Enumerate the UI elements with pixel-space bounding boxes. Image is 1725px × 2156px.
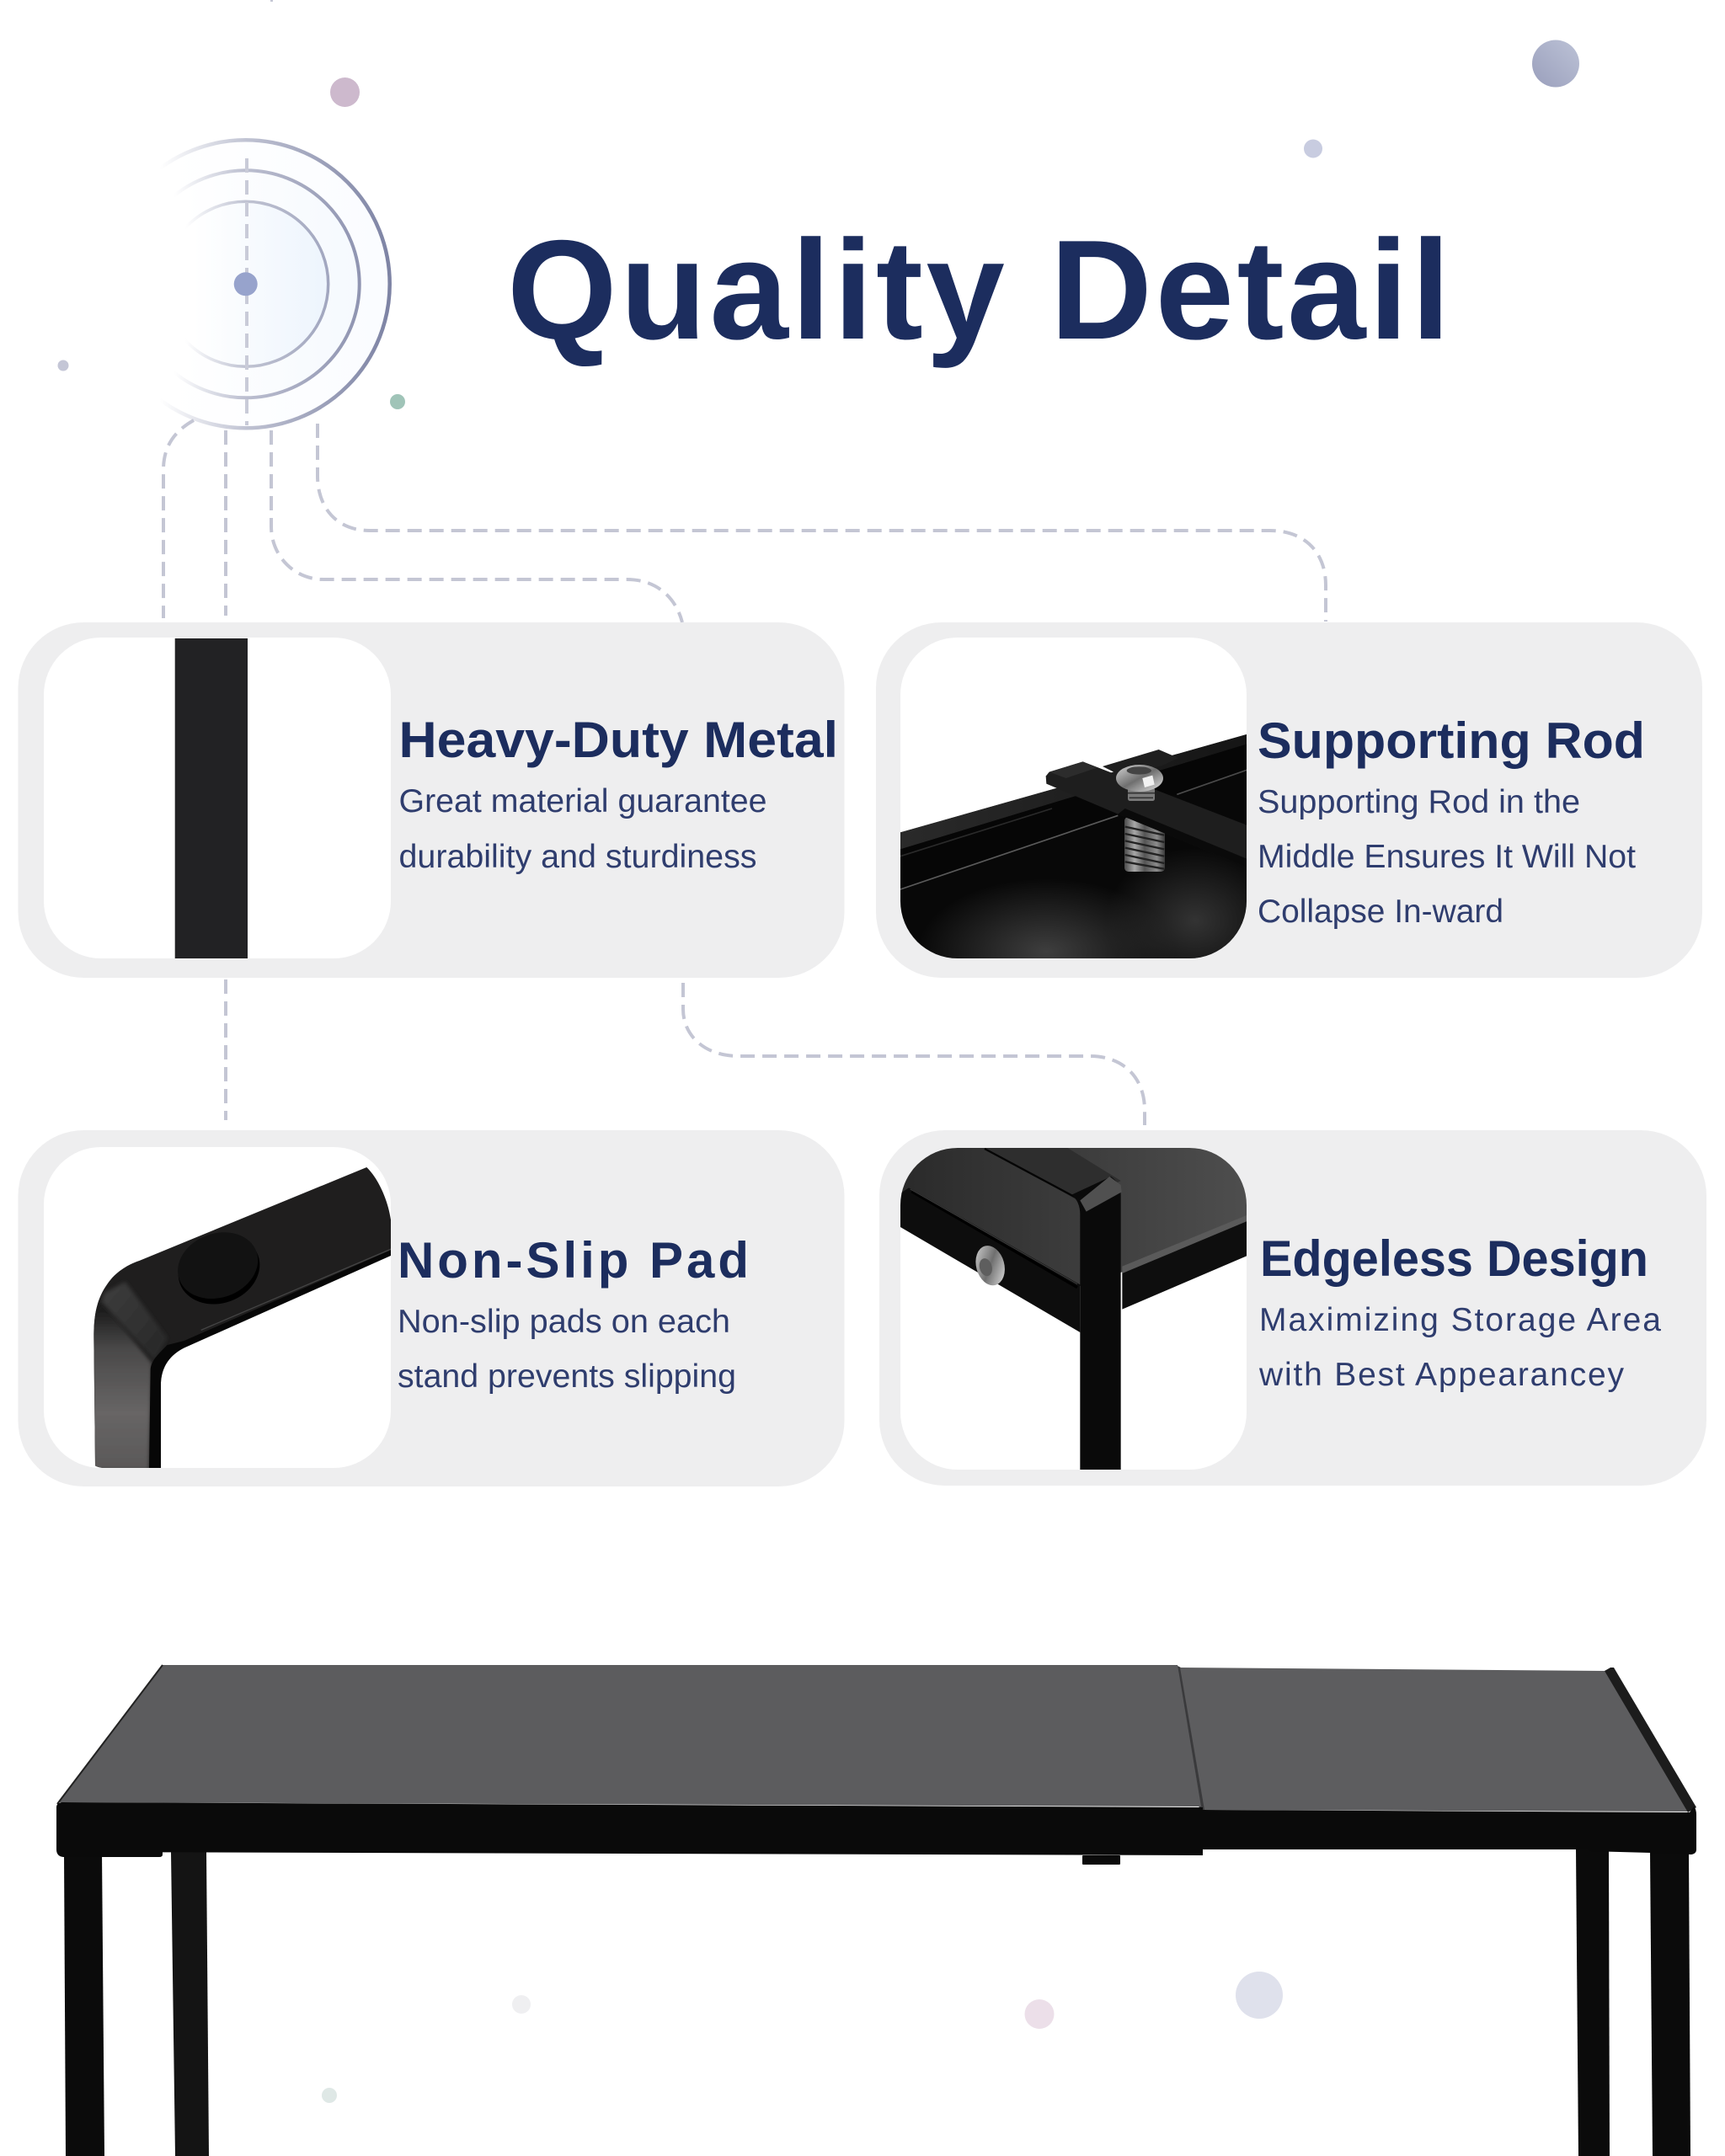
table legs: [64, 1849, 1690, 2156]
icon: concentric target circles: [102, 140, 390, 428]
product photo: black table: [56, 1665, 1696, 2156]
panel: Edgeless Design: [879, 1130, 1706, 1486]
text: Non-Slip Pad description: Non-slip pads on each: [398, 1304, 730, 1340]
decorative dots: bottom: [322, 1972, 1283, 2103]
image: supporting rod and screw: [900, 734, 1247, 958]
title: Quality Detail: [507, 211, 1450, 369]
dashed connector lines: [163, 420, 1326, 1125]
text: Heavy-Duty Metal description: [399, 783, 766, 875]
text: Edgeless Design description: Maximizing Storage Area: [1259, 1302, 1661, 1338]
text: Supporting Rod description: [1258, 784, 1636, 930]
panel: Non-Slip Pad: [19, 1130, 844, 1486]
heading: Edgeless Design: Edgeless Design: [1260, 1230, 1648, 1287]
text: Non-Slip Pad description: [398, 1304, 736, 1395]
panel: Heavy-Duty Metal: [19, 622, 844, 978]
decorative dots: top: [57, 0, 1579, 409]
image: metal leg close-up: [175, 638, 248, 958]
text: Heavy-Duty Metal description: durability and sturdiness: [399, 839, 756, 875]
heading: Heavy-Duty Metal: Heavy-Duty Metal: [399, 712, 838, 768]
text: Edgeless Design description: [1258, 1302, 1661, 1393]
image: non-slip pad on bent leg: [92, 1167, 392, 1470]
text: Supporting Rod description: Supporting Rod in the: [1258, 784, 1580, 820]
table front rail: [56, 1802, 1696, 1865]
image: edgeless table corner: [900, 1147, 1248, 1470]
table top surface: [57, 1665, 1696, 1812]
panel: Supporting Rod: [876, 622, 1702, 978]
text: Supporting Rod description: Middle Ensures It Will Not: [1258, 839, 1636, 875]
text: Supporting Rod description: Collapse In-ward: [1258, 894, 1503, 930]
text: Non-Slip Pad description: stand prevents slipping: [398, 1358, 736, 1395]
text: Heavy-Duty Metal description: Great material guarantee: [399, 783, 766, 819]
heading: Non-Slip Pad: Non-Slip Pad: [398, 1232, 749, 1289]
heading: Supporting Rod: Supporting Rod: [1258, 712, 1645, 769]
text: Edgeless Design description: with Best Appearancey: [1258, 1357, 1624, 1393]
